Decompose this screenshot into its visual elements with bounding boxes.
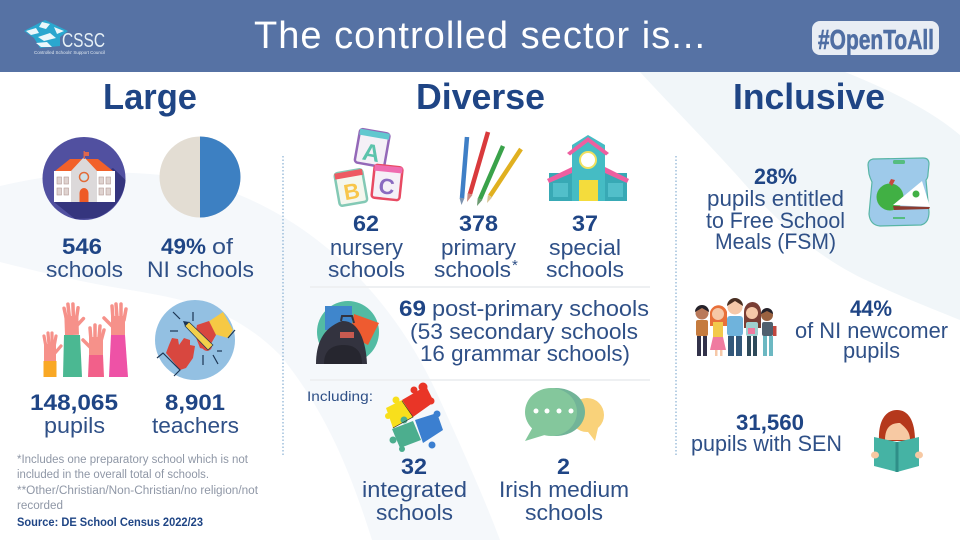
stat: primary schools: *: [512, 257, 518, 274]
stat: free school meals: Meals (FSM): [715, 229, 836, 254]
kid 4: [744, 302, 761, 356]
icon: group of pupils: [695, 298, 776, 356]
icon: backpack: [316, 301, 379, 364]
stat: free school meals: to Free School: [706, 208, 845, 233]
stat: free school meals: [706, 164, 845, 254]
stat: pupils: 148,065: [30, 390, 118, 415]
stat: primary schools: [434, 211, 518, 282]
stat: newcomer pupils: 44%: [850, 296, 892, 321]
icon: lunchbox: [868, 158, 930, 226]
stat: share of NI schools: of: [212, 234, 234, 259]
text: post-primary schools: (53 secondary schools: [410, 319, 638, 344]
stat: newcomer pupils: [795, 296, 948, 363]
stat: share of NI schools: [147, 234, 254, 282]
stat: pupils: [30, 390, 118, 438]
stat: nursery schools: schools: [328, 257, 405, 282]
footnotes: recorded: [17, 500, 63, 512]
kid 2: [710, 305, 727, 356]
icon: speech bubbles: [525, 388, 604, 441]
stat: Irish medium schools: 2: [557, 454, 570, 479]
text: post-primary schools: 16 grammar schools): [420, 341, 630, 366]
logo: CSSC: Controlled Schools' Support Council: [34, 50, 105, 55]
heading: Inclusive: Inclusive: [733, 76, 885, 117]
stat: primary schools: 378: [459, 211, 498, 236]
stat: integrated schools: schools: [376, 500, 453, 525]
logo: CSSC: [24, 20, 105, 55]
icon: alphabet blocks: [334, 129, 403, 206]
panel: inclusive: [691, 76, 948, 472]
panel: large: [17, 76, 259, 529]
stat: special schools: 37: [572, 211, 598, 236]
stat: primary schools: schools: [434, 257, 511, 282]
icon: special school building: [547, 135, 629, 201]
title: The controlled sector is...: [254, 15, 705, 57]
footnotes: Source: DE School Census 2022/23: [17, 517, 203, 529]
stat: nursery schools: [328, 211, 405, 282]
icon: school: [42, 137, 126, 220]
stat: teachers: 8,901: [165, 390, 225, 415]
stat: pupils with SEN: pupils with SEN: [691, 431, 842, 456]
stat: nursery schools: nursery: [330, 235, 403, 260]
stat: Irish medium schools: schools: [525, 500, 603, 525]
stat: newcomer pupils: of NI newcomer: [795, 318, 948, 343]
text: post-primary schools: post-primary schools: [432, 296, 649, 321]
stat: Irish medium schools: [499, 454, 629, 525]
header banner: [0, 0, 960, 72]
stat: integrated schools: integrated: [362, 477, 467, 502]
text: post-primary schools: [399, 296, 649, 366]
icon: child reading book: [871, 410, 923, 472]
stat: pupils with SEN: 31,560: [736, 410, 804, 435]
icon: raised hands: [44, 304, 128, 377]
stat: teachers: teachers: [152, 413, 239, 438]
stat: special schools: schools: [546, 257, 624, 282]
kid 1: [695, 305, 709, 356]
footnotes: [17, 454, 259, 529]
stat: pupils: pupils: [44, 413, 105, 438]
stat: Irish medium schools: Irish medium: [499, 477, 629, 502]
footnotes: **Other/Christian/Non-Christian/no religion/not: [17, 485, 259, 497]
stat: schools: [46, 234, 123, 282]
footnotes: *Includes one preparatory school which is not: [17, 454, 249, 466]
icon: half pie 49%: [160, 136, 240, 218]
kid 3: [727, 298, 743, 356]
stat: schools: 546: [62, 234, 102, 259]
stat: teachers: [152, 390, 239, 438]
icon: jigsaw puzzle: [385, 382, 443, 452]
stat: free school meals: pupils entitled: [707, 186, 844, 211]
stat: free school meals: 28%: [754, 164, 797, 189]
stat: pupils with SEN: [691, 410, 842, 456]
stat: special schools: special: [549, 235, 621, 260]
stat: special schools: [546, 211, 624, 282]
heading: Diverse: Diverse: [416, 76, 545, 117]
icon: alphabet blocks: B: [342, 178, 362, 205]
footnotes: included in the overall total of schools.: [17, 469, 209, 481]
stat: integrated schools: [362, 454, 467, 525]
stat: nursery schools: 62: [353, 211, 379, 236]
panel: diverse: [307, 76, 649, 525]
icon: alphabet blocks: C: [377, 173, 396, 200]
stat: newcomer pupils: pupils: [843, 338, 900, 363]
icon: coloured pencils: [460, 132, 521, 206]
stat: share of NI schools: 49%: [161, 234, 206, 259]
stat: share of NI schools: NI schools: [147, 257, 254, 282]
text: post-primary schools: 69: [399, 296, 426, 321]
heading: Large: Large: [103, 76, 197, 117]
kid 5: [761, 308, 776, 356]
label: including: Including:: [307, 388, 373, 404]
stat: primary schools: primary: [441, 235, 516, 260]
stat: schools: schools: [46, 257, 123, 282]
stat: integrated schools: 32: [401, 454, 427, 479]
logo: CSSC: CSSC: [62, 30, 105, 52]
icon: teachers handing pencil: [155, 300, 235, 380]
icon: alphabet blocks: A: [360, 139, 382, 168]
